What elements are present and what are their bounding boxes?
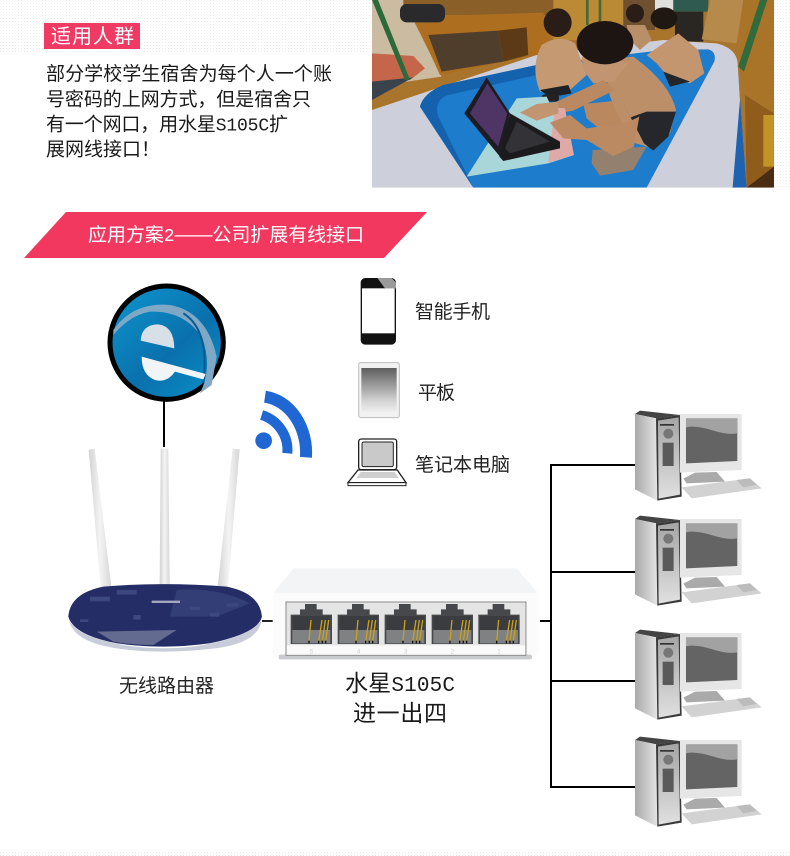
label: wireless router: 无线路由器 xyxy=(119,675,214,697)
text block: description xyxy=(46,63,332,160)
switch S105C: 5 xyxy=(310,648,314,655)
label: tablet: 平板 xyxy=(418,382,455,404)
front swimmer torso xyxy=(603,57,676,148)
text block: description: 部分学校学生宿舍为每个人一个账 xyxy=(46,63,332,85)
computer 4 xyxy=(635,737,762,827)
computer 3 xyxy=(635,630,762,720)
icon: internet globe xyxy=(110,286,223,399)
switch S105C: 1 xyxy=(497,648,501,655)
label: laptop: 笔记本电脑 xyxy=(415,454,510,476)
text block: description: 展网线接口！ xyxy=(46,138,160,160)
icon: laptop xyxy=(348,439,406,486)
dotted background bottom xyxy=(0,851,790,856)
connector: router to switch xyxy=(262,620,274,622)
network bus lines to computers xyxy=(550,464,636,788)
switch S105C: 4 xyxy=(357,648,361,655)
switch S105C xyxy=(273,568,539,659)
label: switch model xyxy=(345,670,455,726)
label: smartphone: 智能手机 xyxy=(415,301,490,323)
icon: tablet xyxy=(359,363,399,418)
connector: switch to bus xyxy=(540,620,551,622)
badge: target users: 适用人群 xyxy=(51,25,134,48)
dotted background top xyxy=(0,0,372,53)
switch S105C: 3 xyxy=(404,648,408,655)
hands and lower arm xyxy=(520,102,558,121)
photo: students in inflatable pool with laptop xyxy=(372,0,774,188)
switch S105C: 2 xyxy=(450,648,454,655)
banner: scheme 2 heading xyxy=(24,212,427,258)
router with antennas xyxy=(68,449,262,652)
computer 1 xyxy=(635,411,762,501)
front swimmer arm reaching xyxy=(556,80,610,112)
front swimmer legs xyxy=(584,101,622,127)
text block: description: 号密码的上网方式，但是宿舍只 xyxy=(46,88,311,110)
label: switch model: 进一出四 xyxy=(353,700,447,726)
dotted background right xyxy=(774,0,790,187)
text block: description: 有一个网口，用水星S105C扩 xyxy=(46,114,288,136)
label: switch model: 水星S105C xyxy=(345,670,455,698)
icon: smartphone xyxy=(361,278,396,345)
icon: wifi signal xyxy=(255,397,306,457)
computer 2 xyxy=(635,516,762,606)
banner: scheme 2 heading: 应用方案2——公司扩展有线接口 xyxy=(88,224,364,247)
connector: internet to router xyxy=(163,395,165,447)
